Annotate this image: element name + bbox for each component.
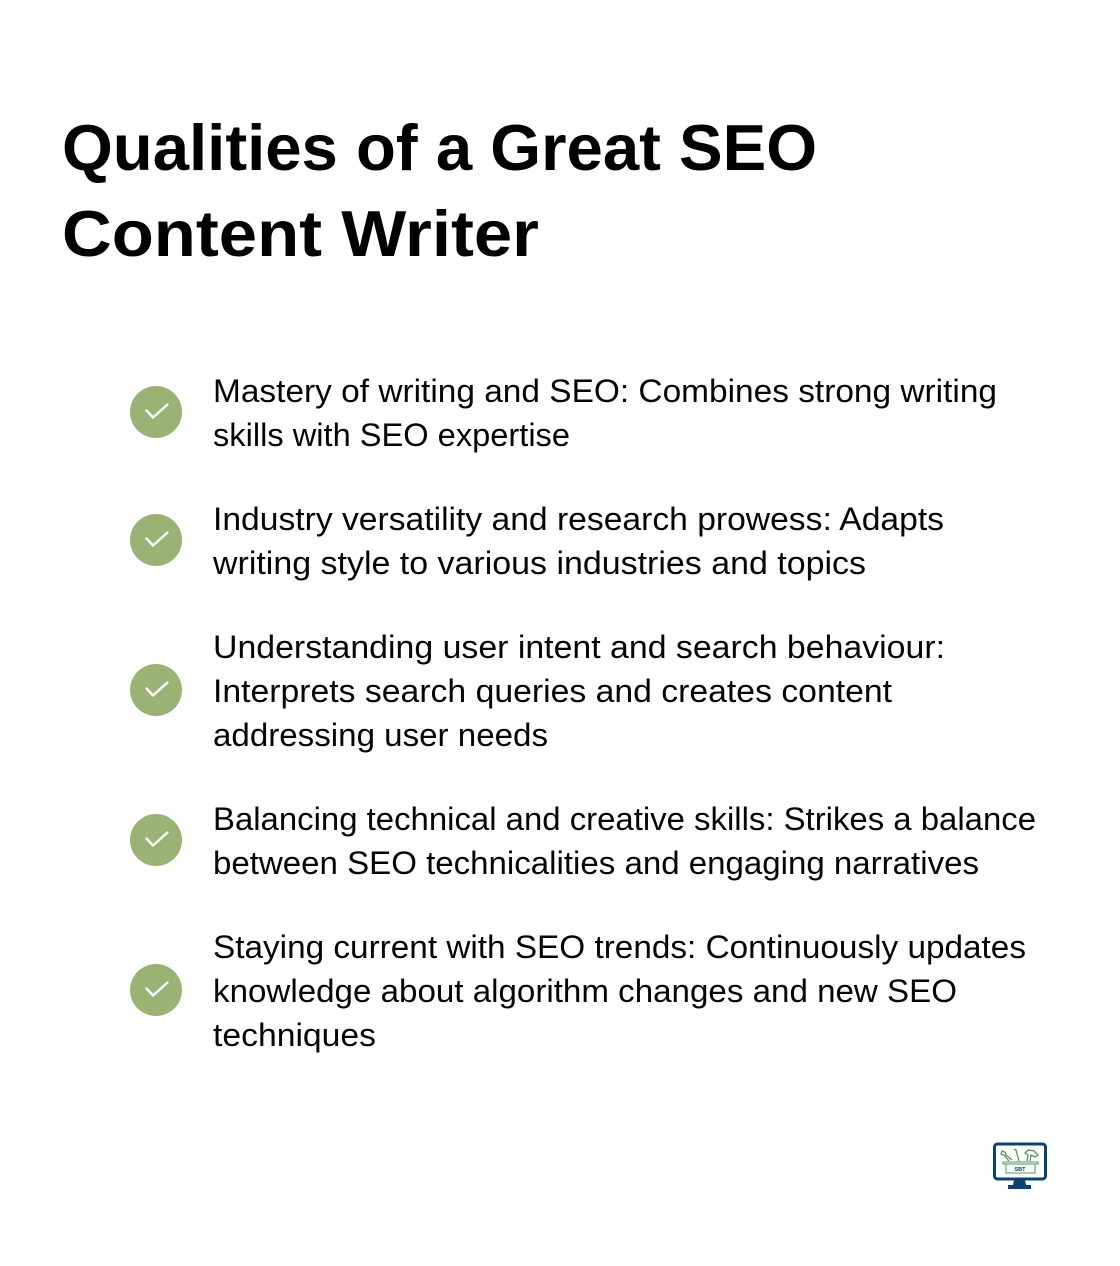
icon: check circle 5 bbox=[130, 964, 182, 1016]
icon: check circle 1 bbox=[130, 386, 182, 438]
list item: user intent bbox=[130, 629, 945, 753]
text: technical and creative balance bbox=[213, 801, 1036, 881]
icon: monitor logo with toolbox bbox=[994, 1144, 1046, 1189]
title: Content Writer bbox=[62, 197, 539, 270]
icon: check circle 4 bbox=[130, 814, 182, 866]
text: technical and creative balance: between SEO technicalities and engaging narratives bbox=[213, 845, 979, 881]
text: technical and creative balance: Balancing technical and creative skills: Strikes a balance bbox=[213, 801, 1036, 837]
text: staying current: techniques bbox=[213, 1017, 376, 1053]
text: mastery of writing and SEO: Mastery of writing and SEO: Combines strong writing bbox=[213, 373, 997, 409]
list item: staying current bbox=[130, 929, 1026, 1053]
text: user intent: Interprets search queries and creates content bbox=[213, 673, 892, 709]
text: industry versatility: writing style to various industries and topics bbox=[212, 545, 866, 581]
text: staying current bbox=[213, 929, 1026, 1053]
text: mastery of writing and SEO: skills with SEO expertise bbox=[213, 417, 570, 453]
title: Qualities of a Great SEO bbox=[62, 111, 817, 184]
list item: mastery of writing and SEO bbox=[130, 373, 997, 453]
list item: industry versatility bbox=[130, 501, 944, 581]
text: mastery of writing and SEO bbox=[213, 373, 997, 453]
icon: check circle 3 bbox=[130, 664, 182, 716]
text: industry versatility: Industry versatility and research prowess: Adapts bbox=[213, 501, 944, 537]
text: industry versatility bbox=[212, 501, 944, 581]
text: staying current: Staying current with SEO trends: Continuously updates bbox=[213, 929, 1026, 965]
icon: monitor logo with toolbox: SBT bbox=[1014, 1167, 1026, 1173]
list item: technical and creative balance bbox=[130, 801, 1036, 881]
text: user intent: addressing user needs bbox=[213, 717, 548, 753]
text: staying current: knowledge about algorithm changes and new SEO bbox=[213, 973, 957, 1009]
icon: check circle 2 bbox=[130, 514, 182, 566]
text: user intent bbox=[213, 629, 945, 753]
text: user intent: Understanding user intent and search behaviour: bbox=[213, 629, 945, 665]
title bbox=[62, 111, 817, 270]
